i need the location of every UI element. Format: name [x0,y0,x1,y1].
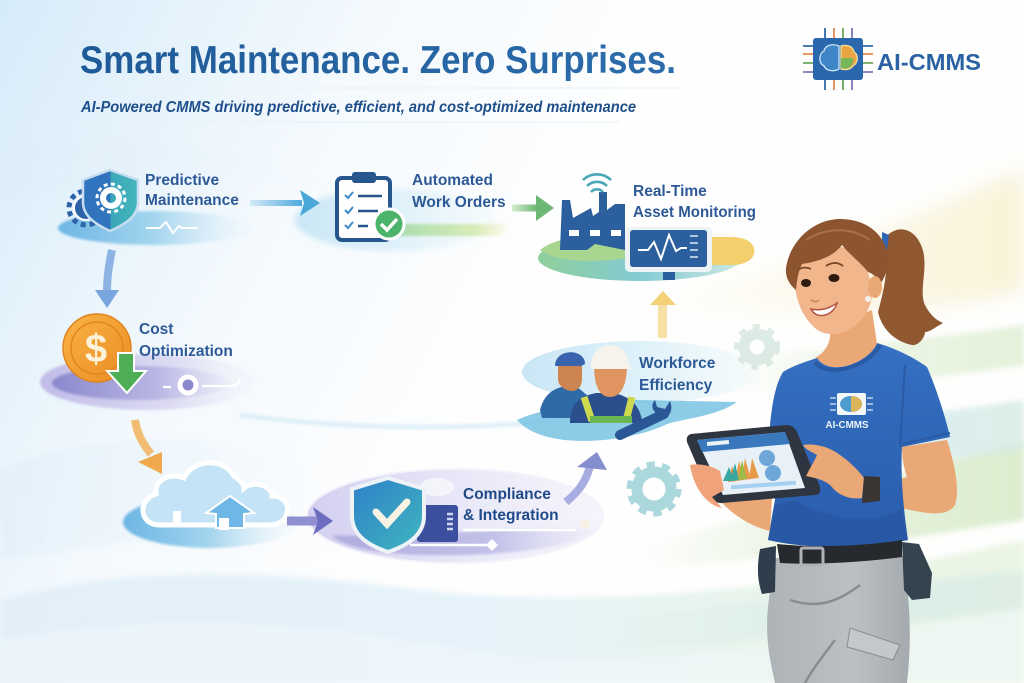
shirt [768,343,950,547]
arrow: work orders to monitoring [512,195,554,221]
logo: AI-CMMS [803,28,981,90]
node: Predictive Maintenance [58,170,252,245]
icon: dollar coin [63,314,146,393]
node: Automated Work Orders [295,172,510,251]
tool pouches [758,546,776,594]
arrow: predictive down to cost [95,250,119,308]
ellipse base [538,235,742,281]
arrow: compliance to workforce [566,452,607,502]
forearm right [878,440,957,513]
node: Real-Time Asset Monitoring [538,174,756,281]
title: Smart Maintenance. Zero Surprises. [80,39,676,82]
node: Compliance & Integration [307,469,603,563]
node: Cost Optimization [40,314,256,410]
hair tie [882,232,889,250]
icon: dollar coin: $ [85,327,107,371]
hand right [803,444,864,498]
label: Work Orders [412,194,506,211]
ellipse base [307,469,603,563]
watch [862,476,880,503]
ponytail [878,229,943,345]
logo wordmark: AI-CMMS [877,49,981,75]
belt [777,540,902,565]
hand left [690,464,724,508]
icon: workers [540,345,671,435]
ellipse base [522,341,758,403]
arrow: cloud to compliance [287,507,333,535]
trousers [767,556,910,683]
eyes [801,279,811,287]
pulse line [146,222,198,233]
label: Predictive [145,172,219,189]
label: Cost [139,321,173,338]
mouth [811,303,837,316]
head and hair [786,219,888,334]
label: & Integration [463,507,559,524]
label: Asset Monitoring [633,204,756,221]
label: Workforce [639,355,716,372]
icon: gears and shield [69,170,138,231]
label: Automated [412,172,493,189]
icon: cloud with house [143,463,288,530]
icon: monitor [625,227,712,280]
node: Workforce Efficiency [517,341,758,441]
icon: small gear [163,377,239,393]
forearm left [722,498,772,531]
shirt logo: AI-CMMS [826,419,868,431]
ellipse base [58,211,252,245]
decorative gears [630,327,777,513]
icon: gear large [630,465,678,513]
icon: clipboard [337,172,404,240]
label: Maintenance [145,192,239,209]
trouser pocket [847,628,900,660]
ellipse base [295,189,495,251]
icon: AI chip [803,28,873,90]
icon: shield with check [352,478,458,552]
label: Efficiency [639,377,713,394]
label: Compliance [463,486,551,503]
ellipse base [123,496,297,548]
ear [868,276,882,298]
icon: factory [560,174,625,250]
arrow: workforce up to monitoring [650,291,676,338]
subtitle: AI-Powered CMMS driving predictive, efficient, and cost-optimized maintenance [80,99,636,116]
icon: yellow pill [706,237,754,265]
icon: gear faint [737,327,777,367]
label: Real-Time [633,183,707,200]
tablet [687,425,820,503]
shirt logo [826,393,873,431]
ellipse base [40,354,256,410]
character: technician with tablet [687,219,957,683]
node: Cloud [123,463,297,548]
label: Optimization [139,343,233,360]
arrow: predictive to work orders [250,190,320,216]
arrow: cost to cloud [135,420,162,474]
neck [815,310,877,367]
